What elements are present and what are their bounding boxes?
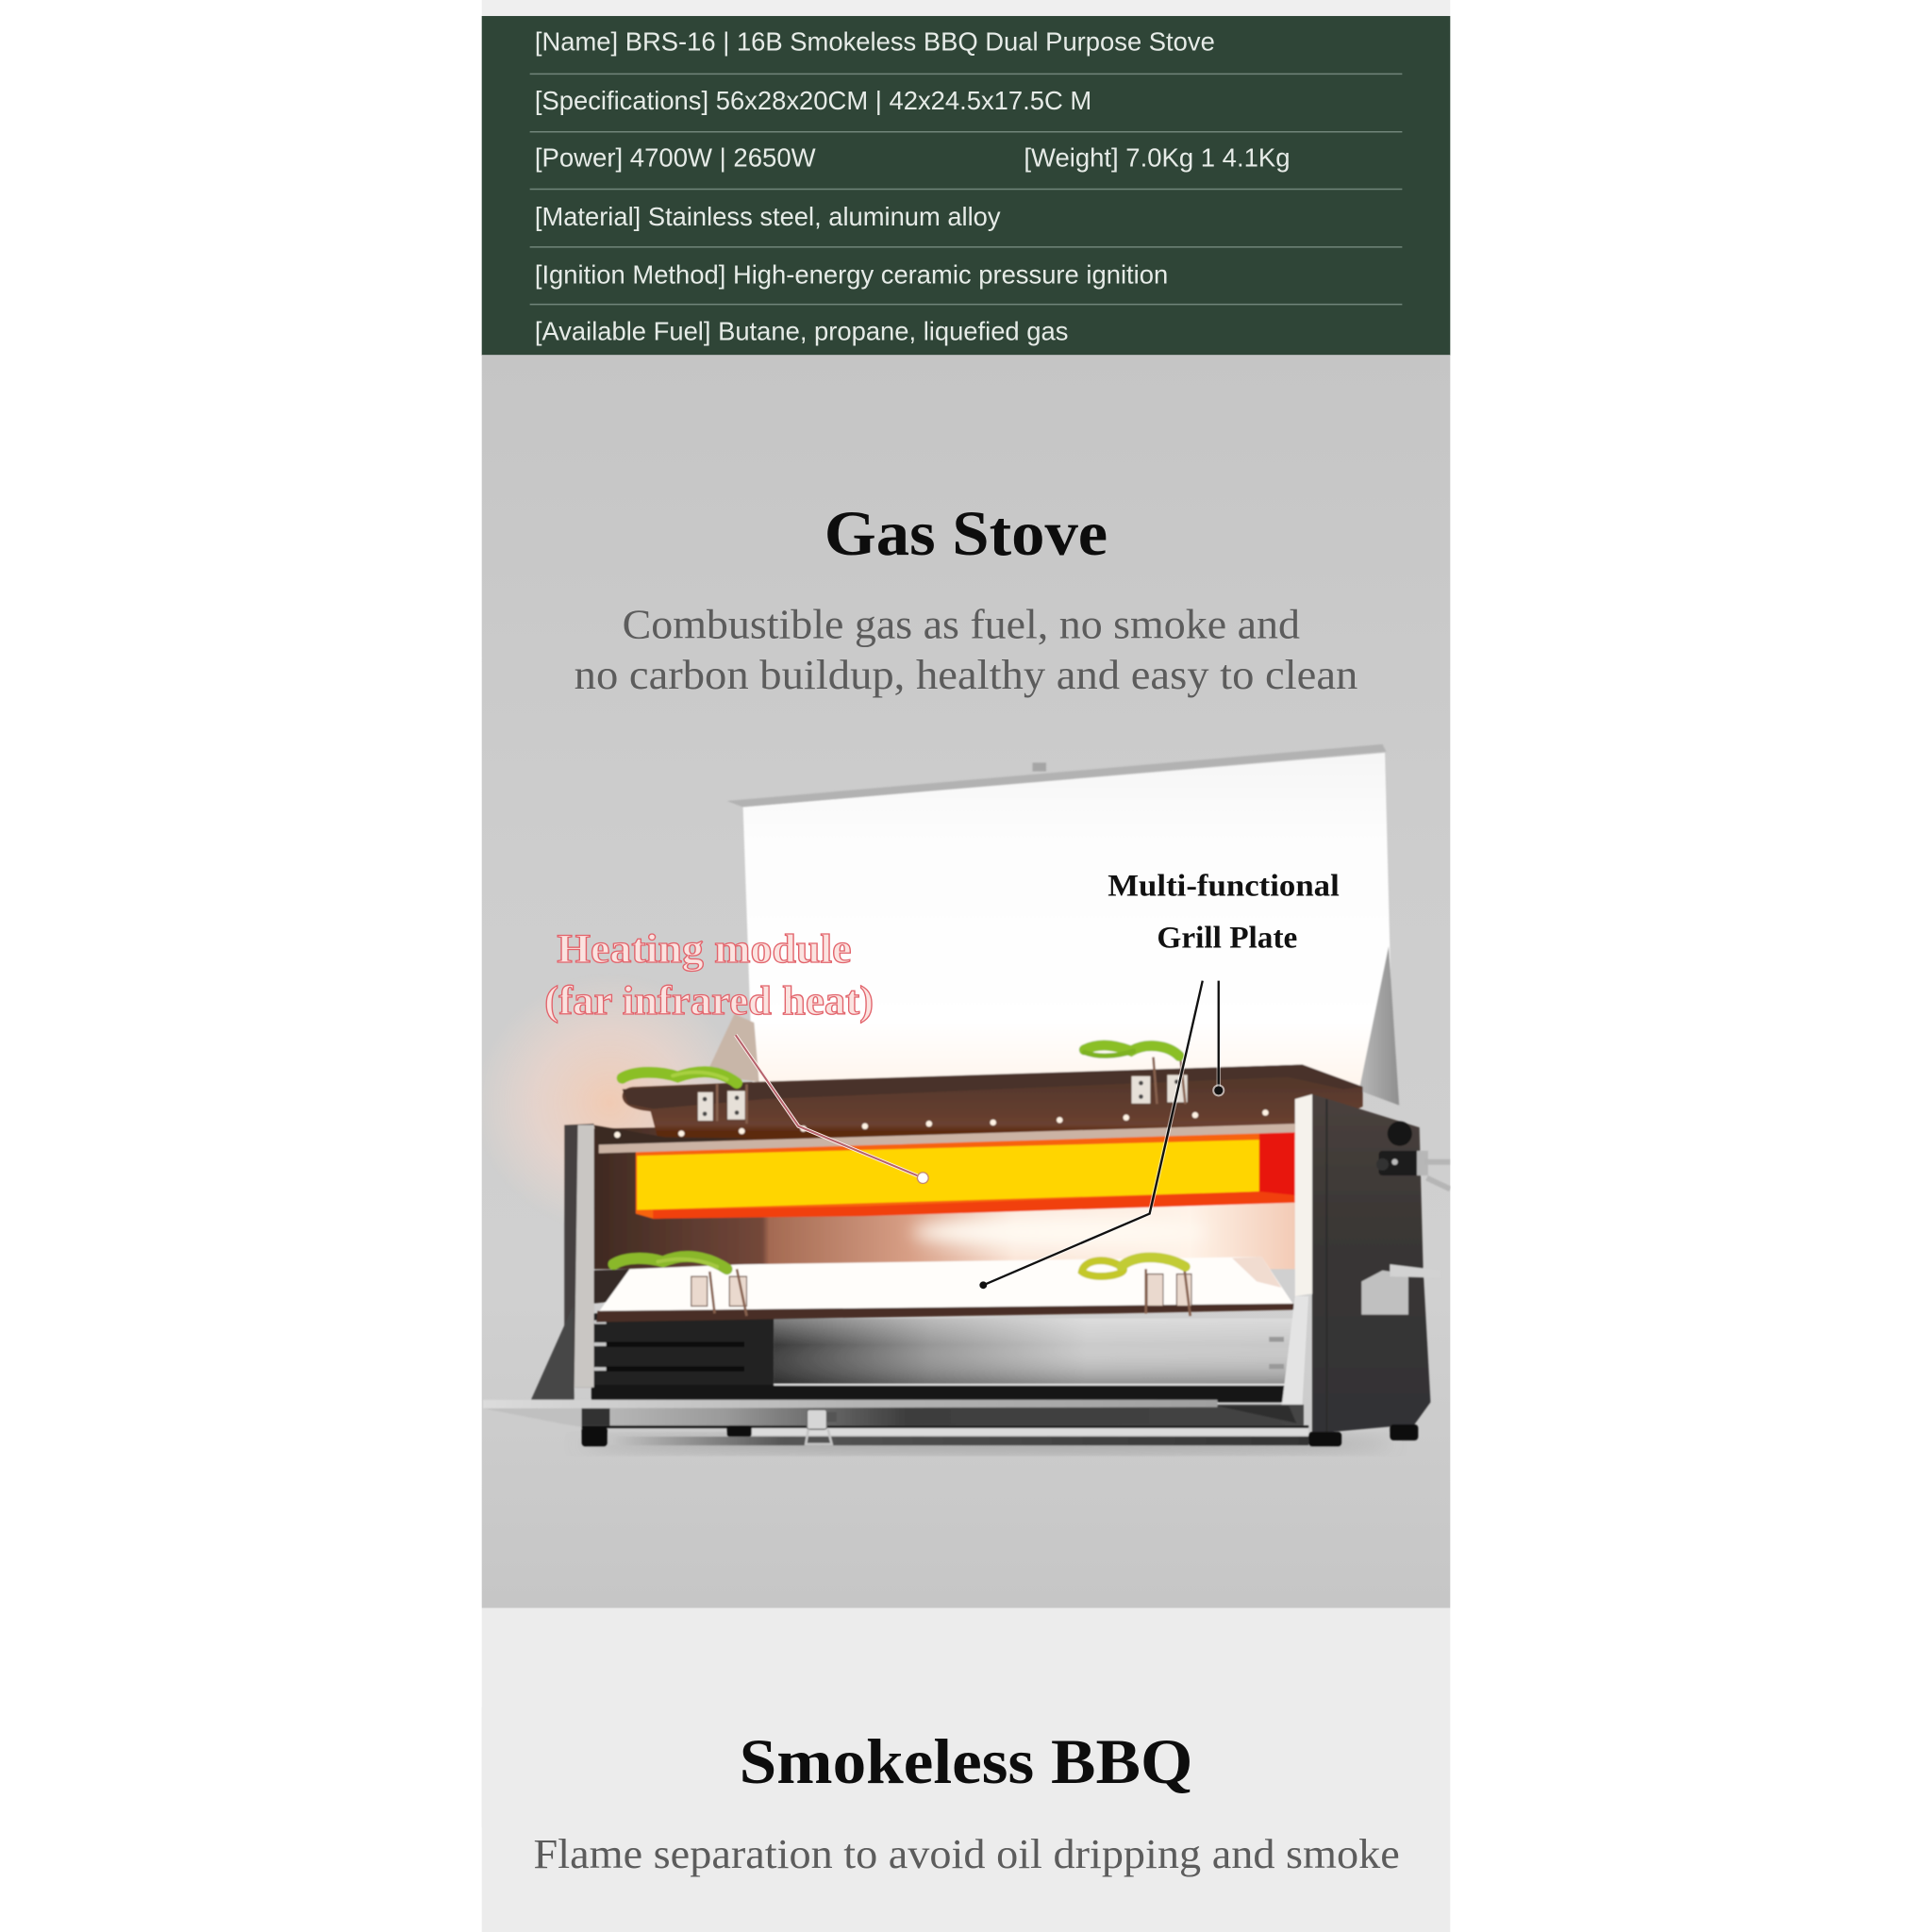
green grip: upper left [623, 1072, 737, 1083]
spec: weight: [Weight] 7.0Kg 1 4.1Kg [1024, 142, 1291, 172]
heat glow [499, 997, 724, 1216]
spec: material: [Material] Stainless steel, aluminum alloy [535, 202, 1001, 231]
heading: smokeless bbq: Smokeless BBQ [740, 1725, 1192, 1797]
heading: gas stove: Gas Stove [824, 497, 1108, 569]
lower stainless interior [591, 1307, 1295, 1402]
leader: heating module [736, 1035, 928, 1184]
cavity back wall [594, 1115, 1295, 1269]
gas stove description: Combustible gas as fuel, no smoke and [623, 601, 1300, 648]
green grip: lower left [613, 1257, 727, 1269]
right lid stay [1359, 946, 1399, 1106]
front door [483, 1400, 1308, 1445]
panel: smokeless bbq background [482, 1607, 1450, 1932]
right side body [1295, 1094, 1430, 1437]
gas stove description [575, 601, 1357, 698]
white lower grill tray [591, 1257, 1293, 1322]
callout: heating module label [544, 927, 874, 1024]
rivets [614, 1109, 1269, 1138]
leader: grill plate [1212, 981, 1224, 1096]
grill plate brackets [691, 1058, 1191, 1316]
callout: multi-functional grill plate label: Multi-functional [1108, 870, 1340, 904]
floor shadow [579, 1437, 1392, 1452]
green grip: upper right [1084, 1045, 1179, 1056]
gas pipe [1424, 1162, 1450, 1189]
heating module [636, 1130, 1295, 1219]
right door stay [1281, 1296, 1308, 1406]
callout: heating module label: (far infrared heat) [544, 979, 874, 1024]
left door stay [530, 1325, 575, 1401]
callout: multi-functional grill plate label [1108, 870, 1340, 955]
grill plate tray [623, 1064, 1363, 1148]
upper rail [599, 1124, 1295, 1154]
illustration: open gas stove [475, 744, 1450, 1452]
stove feet [581, 1424, 1418, 1446]
open lid [727, 744, 1393, 1091]
panel: specifications [482, 16, 1450, 356]
spec: power: [Power] 4700W | 2650W [535, 142, 816, 172]
back wall light [912, 1217, 1208, 1247]
callout: heating module label: Heating module [557, 927, 852, 972]
side handle [1360, 1263, 1424, 1316]
spec: name: [Name] BRS-16 | 16B Smokeless BBQ Dual Purpose Stove [535, 27, 1215, 57]
left post [564, 1124, 594, 1388]
control knobs [1376, 1122, 1428, 1175]
spec: dimensions: [Specifications] 56x28x20CM | 42x24.5x17.5C M [535, 86, 1091, 115]
cavity corner bracket [594, 1124, 754, 1148]
smokeless bbq description: Flame separation to avoid oil dripping and smoke [534, 1830, 1400, 1877]
spec: ignition: [Ignition Method] High-energy ceramic pressure ignition [535, 259, 1168, 289]
door latch [806, 1409, 837, 1444]
spec: fuel: [Available Fuel] Butane, propane, liquefied gas [535, 316, 1068, 345]
left post strip [575, 1124, 594, 1388]
callout: multi-functional grill plate label: Grill Plate [1157, 921, 1297, 955]
top light strip [482, 0, 1450, 17]
gas stove description: no carbon buildup, healthy and easy to clean [575, 651, 1357, 698]
leader: lower plate [979, 981, 1203, 1289]
green grip: lower right [1082, 1257, 1185, 1276]
panel: gas stove background [482, 355, 1450, 1607]
left lid stay [706, 1014, 759, 1082]
